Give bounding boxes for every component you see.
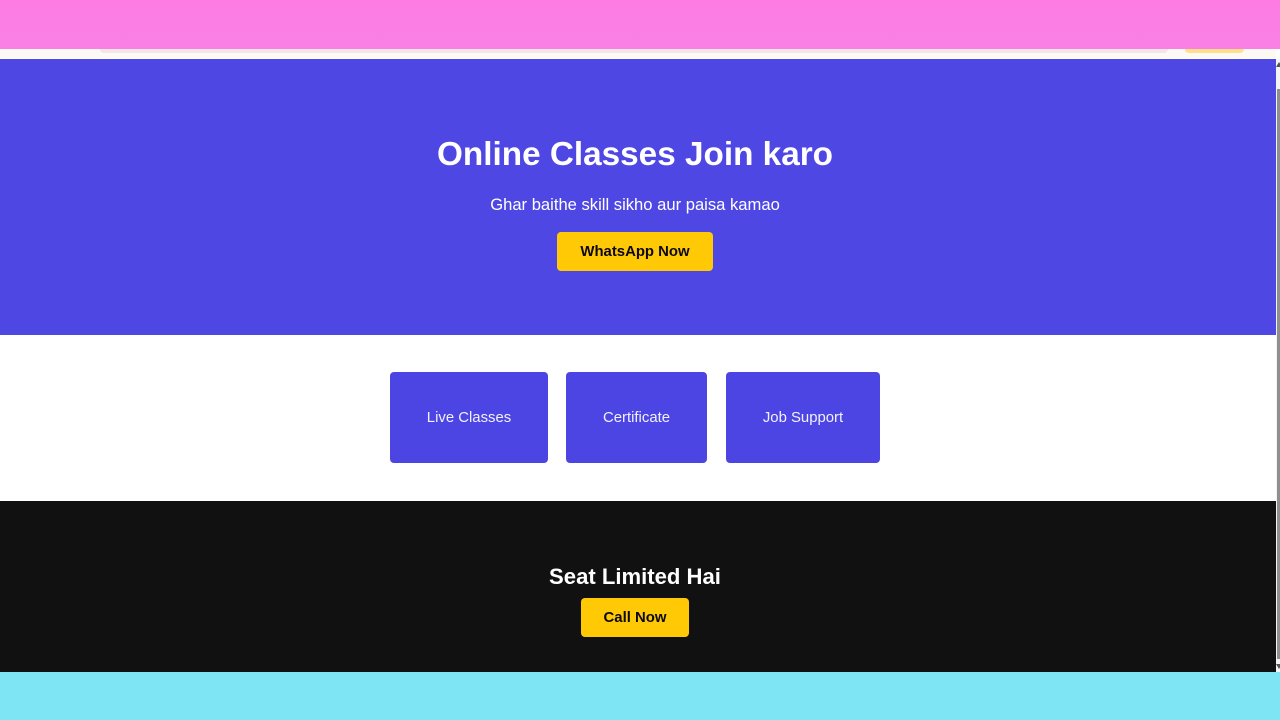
navigation button remnant (1185, 49, 1244, 53)
cut-off navigation strip (0, 49, 1276, 58)
scrollbar thumb (1277, 89, 1280, 659)
Call Now button (581, 598, 689, 637)
scrollbar down arrow (1276, 664, 1280, 669)
WhatsApp button: WhatsApp Now (580, 244, 690, 260)
hero subheading: Ghar baithe skill sikho aur paisa kamao (490, 195, 780, 214)
scrollbar (1276, 59, 1280, 672)
call to action section (0, 501, 1276, 672)
scrollbar up arrow (1276, 62, 1280, 67)
feature card: Certificate: Certificate (603, 410, 670, 426)
features section (0, 335, 1276, 501)
feature card: Live Classes (390, 372, 548, 463)
hero heading: Online Classes Join karo (437, 136, 833, 173)
feature card: Job Support: Job Support (763, 410, 843, 426)
feature card: Certificate (566, 372, 707, 463)
feature card: Job Support (726, 372, 880, 463)
call to action heading: Seat Limited Hai (549, 564, 721, 589)
hero section (0, 59, 1276, 335)
navigation search bar remnant (100, 49, 1168, 53)
Call Now button: Call Now (604, 610, 666, 626)
top pink banner (0, 0, 1280, 49)
WhatsApp button (557, 232, 713, 271)
bottom cyan banner (0, 672, 1280, 720)
feature card: Live Classes: Live Classes (427, 410, 511, 426)
